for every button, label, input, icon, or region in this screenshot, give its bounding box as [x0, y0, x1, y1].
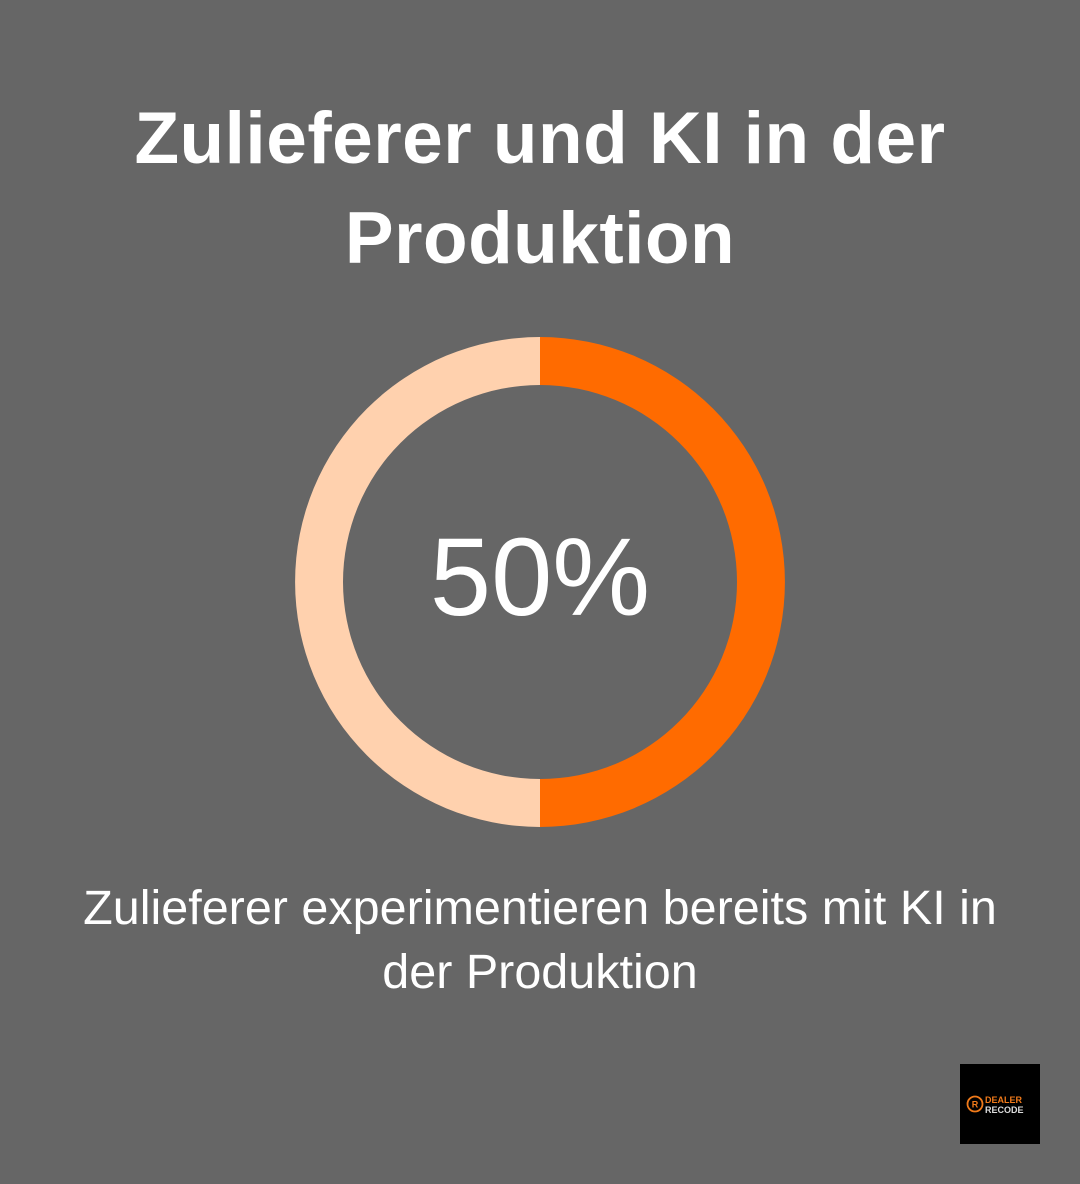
logo icon: R — [972, 1100, 979, 1110]
caption — [83, 881, 997, 999]
percentage value: 50% — [430, 516, 650, 639]
logo text — [985, 1095, 1024, 1115]
caption: Zulieferer experimentieren bereits mit KI in — [83, 881, 997, 935]
title: Zulieferer und KI in der — [134, 98, 946, 179]
title: Produktion — [345, 198, 735, 279]
logo: Dealer Recode — [960, 1064, 1040, 1144]
caption: der Produktion — [382, 945, 698, 999]
donut ring: 50% share — [540, 337, 785, 827]
title — [134, 98, 946, 279]
logo text: RECODE — [985, 1105, 1024, 1115]
logo text: DEALER — [985, 1095, 1023, 1105]
donut ring: remaining — [295, 337, 540, 827]
